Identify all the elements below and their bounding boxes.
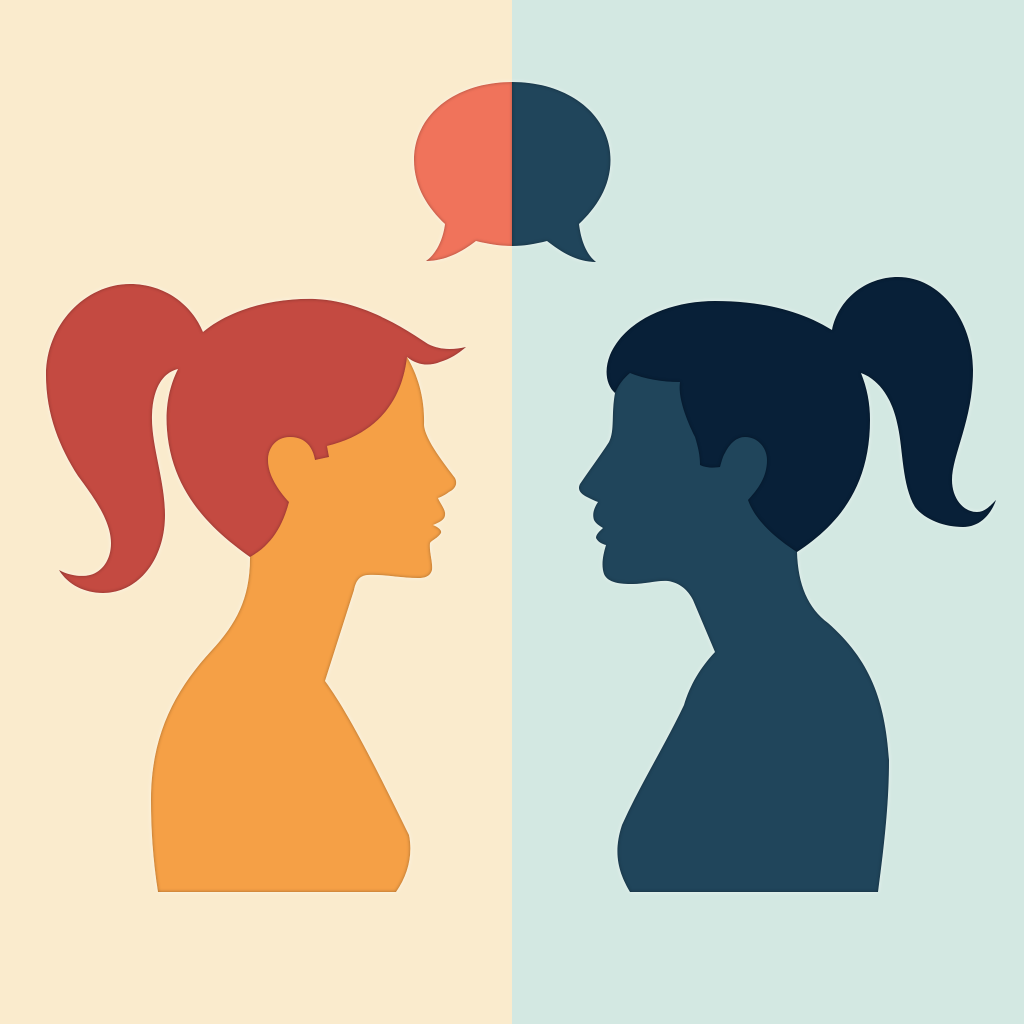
right figure (579, 277, 996, 892)
speech bubble right half (512, 82, 610, 262)
panel: left cream background (0, 0, 512, 1024)
right figure body and face (579, 360, 889, 892)
panel: right mint background (512, 0, 1024, 1024)
speech bubble left half (414, 82, 512, 261)
left figure body and face (151, 340, 456, 892)
right figure hair and ponytail (607, 277, 996, 552)
left figure hair and ponytail (46, 284, 466, 593)
left figure (46, 284, 466, 892)
icon: speech bubble (414, 82, 610, 262)
